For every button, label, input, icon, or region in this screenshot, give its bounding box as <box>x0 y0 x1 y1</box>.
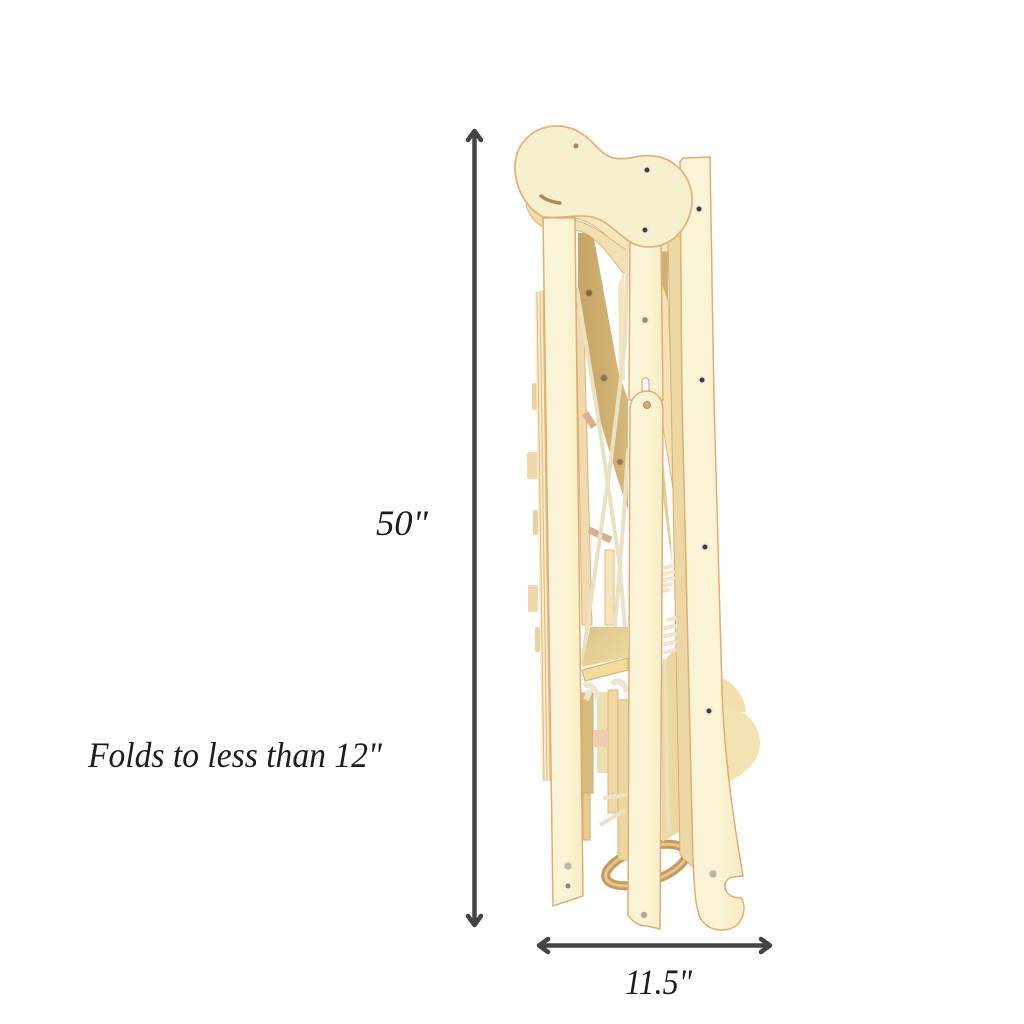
right front leg with hook notch <box>680 157 744 930</box>
rung lower <box>589 530 611 540</box>
rope coils <box>664 566 675 832</box>
right inner upper <box>662 283 674 495</box>
width arrow <box>539 939 770 952</box>
mid slat <box>605 550 614 625</box>
ropes <box>577 243 628 663</box>
left front slat <box>543 218 583 906</box>
swing seat <box>582 627 628 825</box>
rung upper <box>585 413 594 427</box>
bolts <box>586 290 592 296</box>
ladder board with climbing holds <box>527 290 553 781</box>
rear half-round rocker <box>720 678 760 785</box>
center lower slat with rounded top <box>628 391 663 929</box>
folded climbing frame <box>515 126 760 930</box>
label: height: 50" <box>376 503 429 543</box>
center upper slat <box>629 240 663 400</box>
bottom slats <box>582 693 593 793</box>
rear darker right slat <box>668 236 696 870</box>
layered top plates behind <box>526 200 668 273</box>
ring handle <box>601 836 691 894</box>
label: width: 11.5" <box>625 962 693 1002</box>
label: folds note: Folds to less than 12" <box>87 735 383 775</box>
diagonal shaded board <box>578 233 628 510</box>
left inner slat <box>576 300 592 625</box>
thin upper cross board <box>618 270 625 380</box>
gold body right of center <box>662 640 682 842</box>
inner back slats <box>576 233 682 860</box>
height arrow <box>468 131 481 925</box>
top peanut-shaped side plate <box>515 126 692 247</box>
